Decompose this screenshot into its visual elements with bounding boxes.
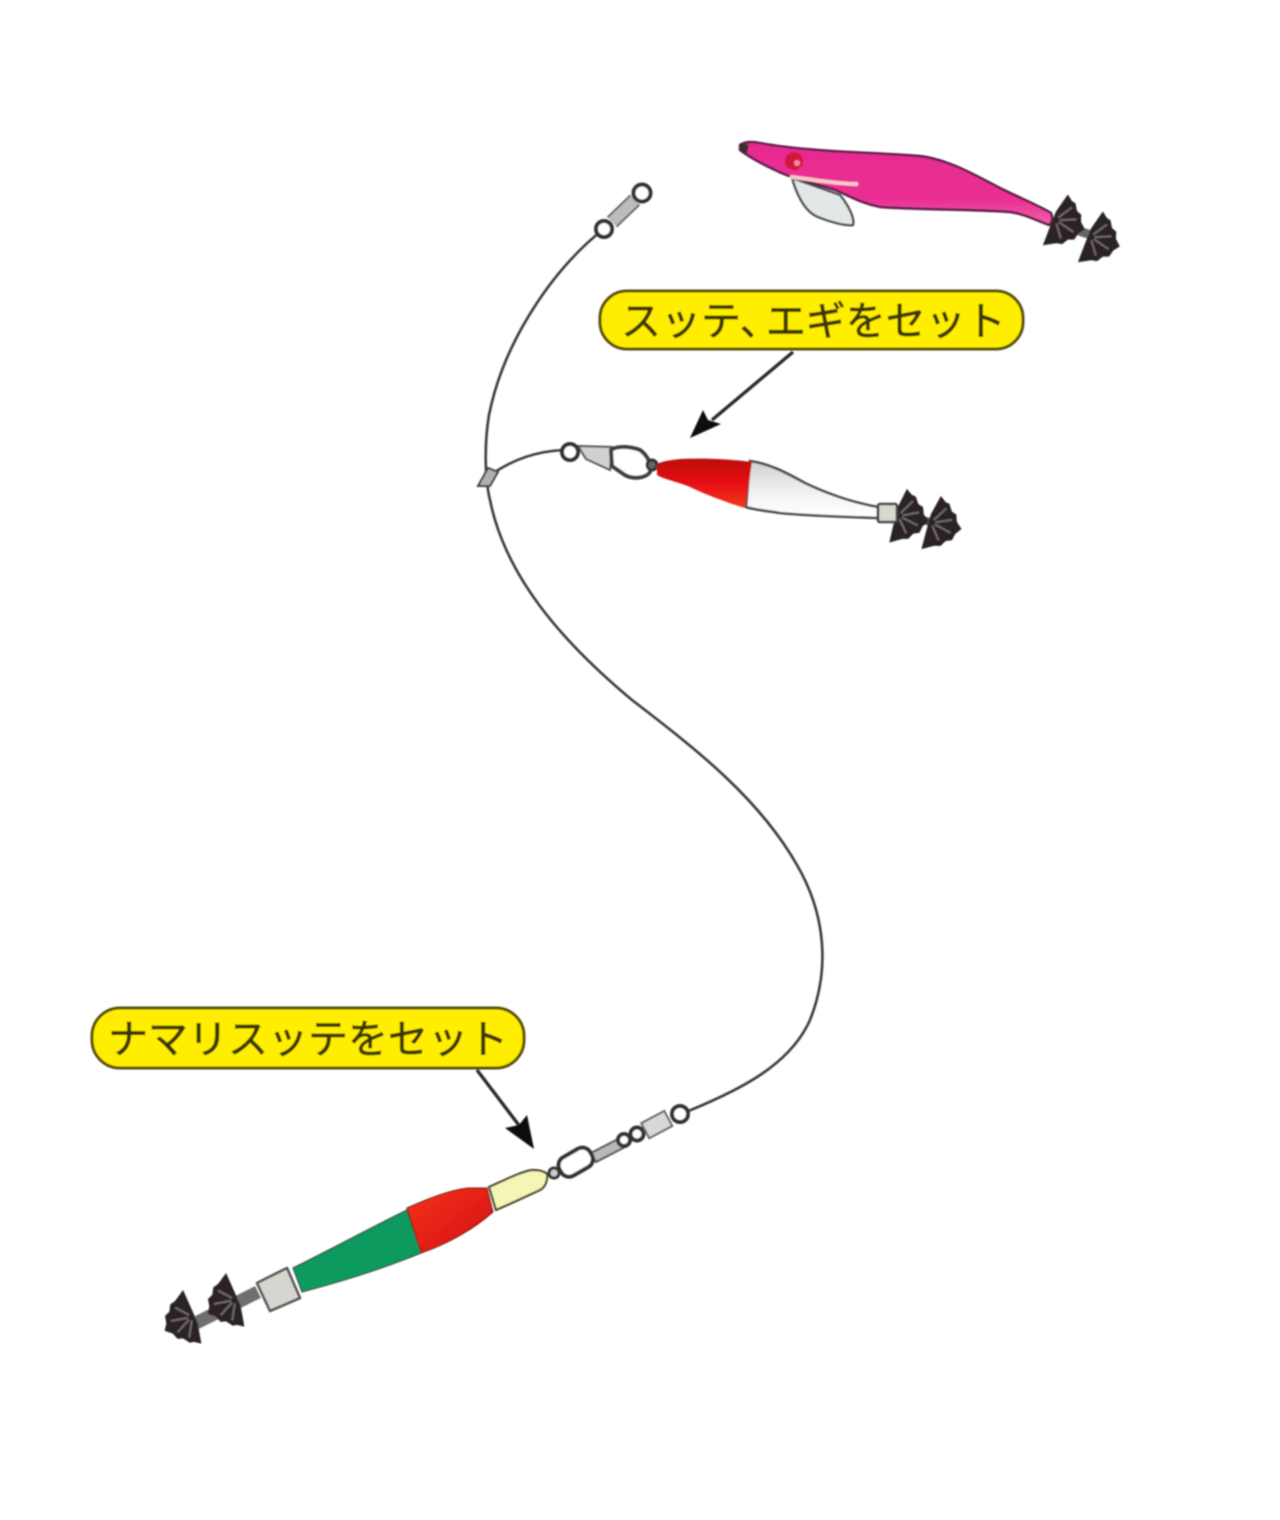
lure collar	[257, 1268, 300, 1311]
arrow: to lead sutte	[477, 1070, 534, 1149]
jig fin	[792, 178, 853, 225]
cream section	[489, 1170, 547, 1210]
jig eye	[785, 152, 803, 170]
snap swivel	[562, 444, 657, 478]
branch line and knot	[478, 450, 564, 486]
lure body	[746, 461, 878, 518]
snap swivel	[549, 1106, 688, 1180]
top swivel	[596, 184, 650, 237]
green section	[293, 1210, 421, 1292]
callout: set lead sutte: ナマリスッテをセット	[108, 1018, 508, 1062]
green and red lead sutte	[152, 1106, 688, 1356]
red section	[407, 1188, 493, 1253]
rig illustration	[92, 142, 1128, 1356]
main fishing line	[486, 229, 822, 1112]
lure collar	[878, 504, 897, 522]
callout: set sutte or egi	[600, 291, 1023, 349]
red and white sutte	[562, 444, 967, 556]
callout: set lead sutte	[92, 1008, 524, 1068]
jig body	[740, 142, 1052, 225]
pink squid jig (egi)	[740, 142, 1128, 273]
arrow: to red sutte	[690, 352, 793, 438]
callout: set sutte or egi: スッテ、エギをセット	[621, 300, 1006, 344]
